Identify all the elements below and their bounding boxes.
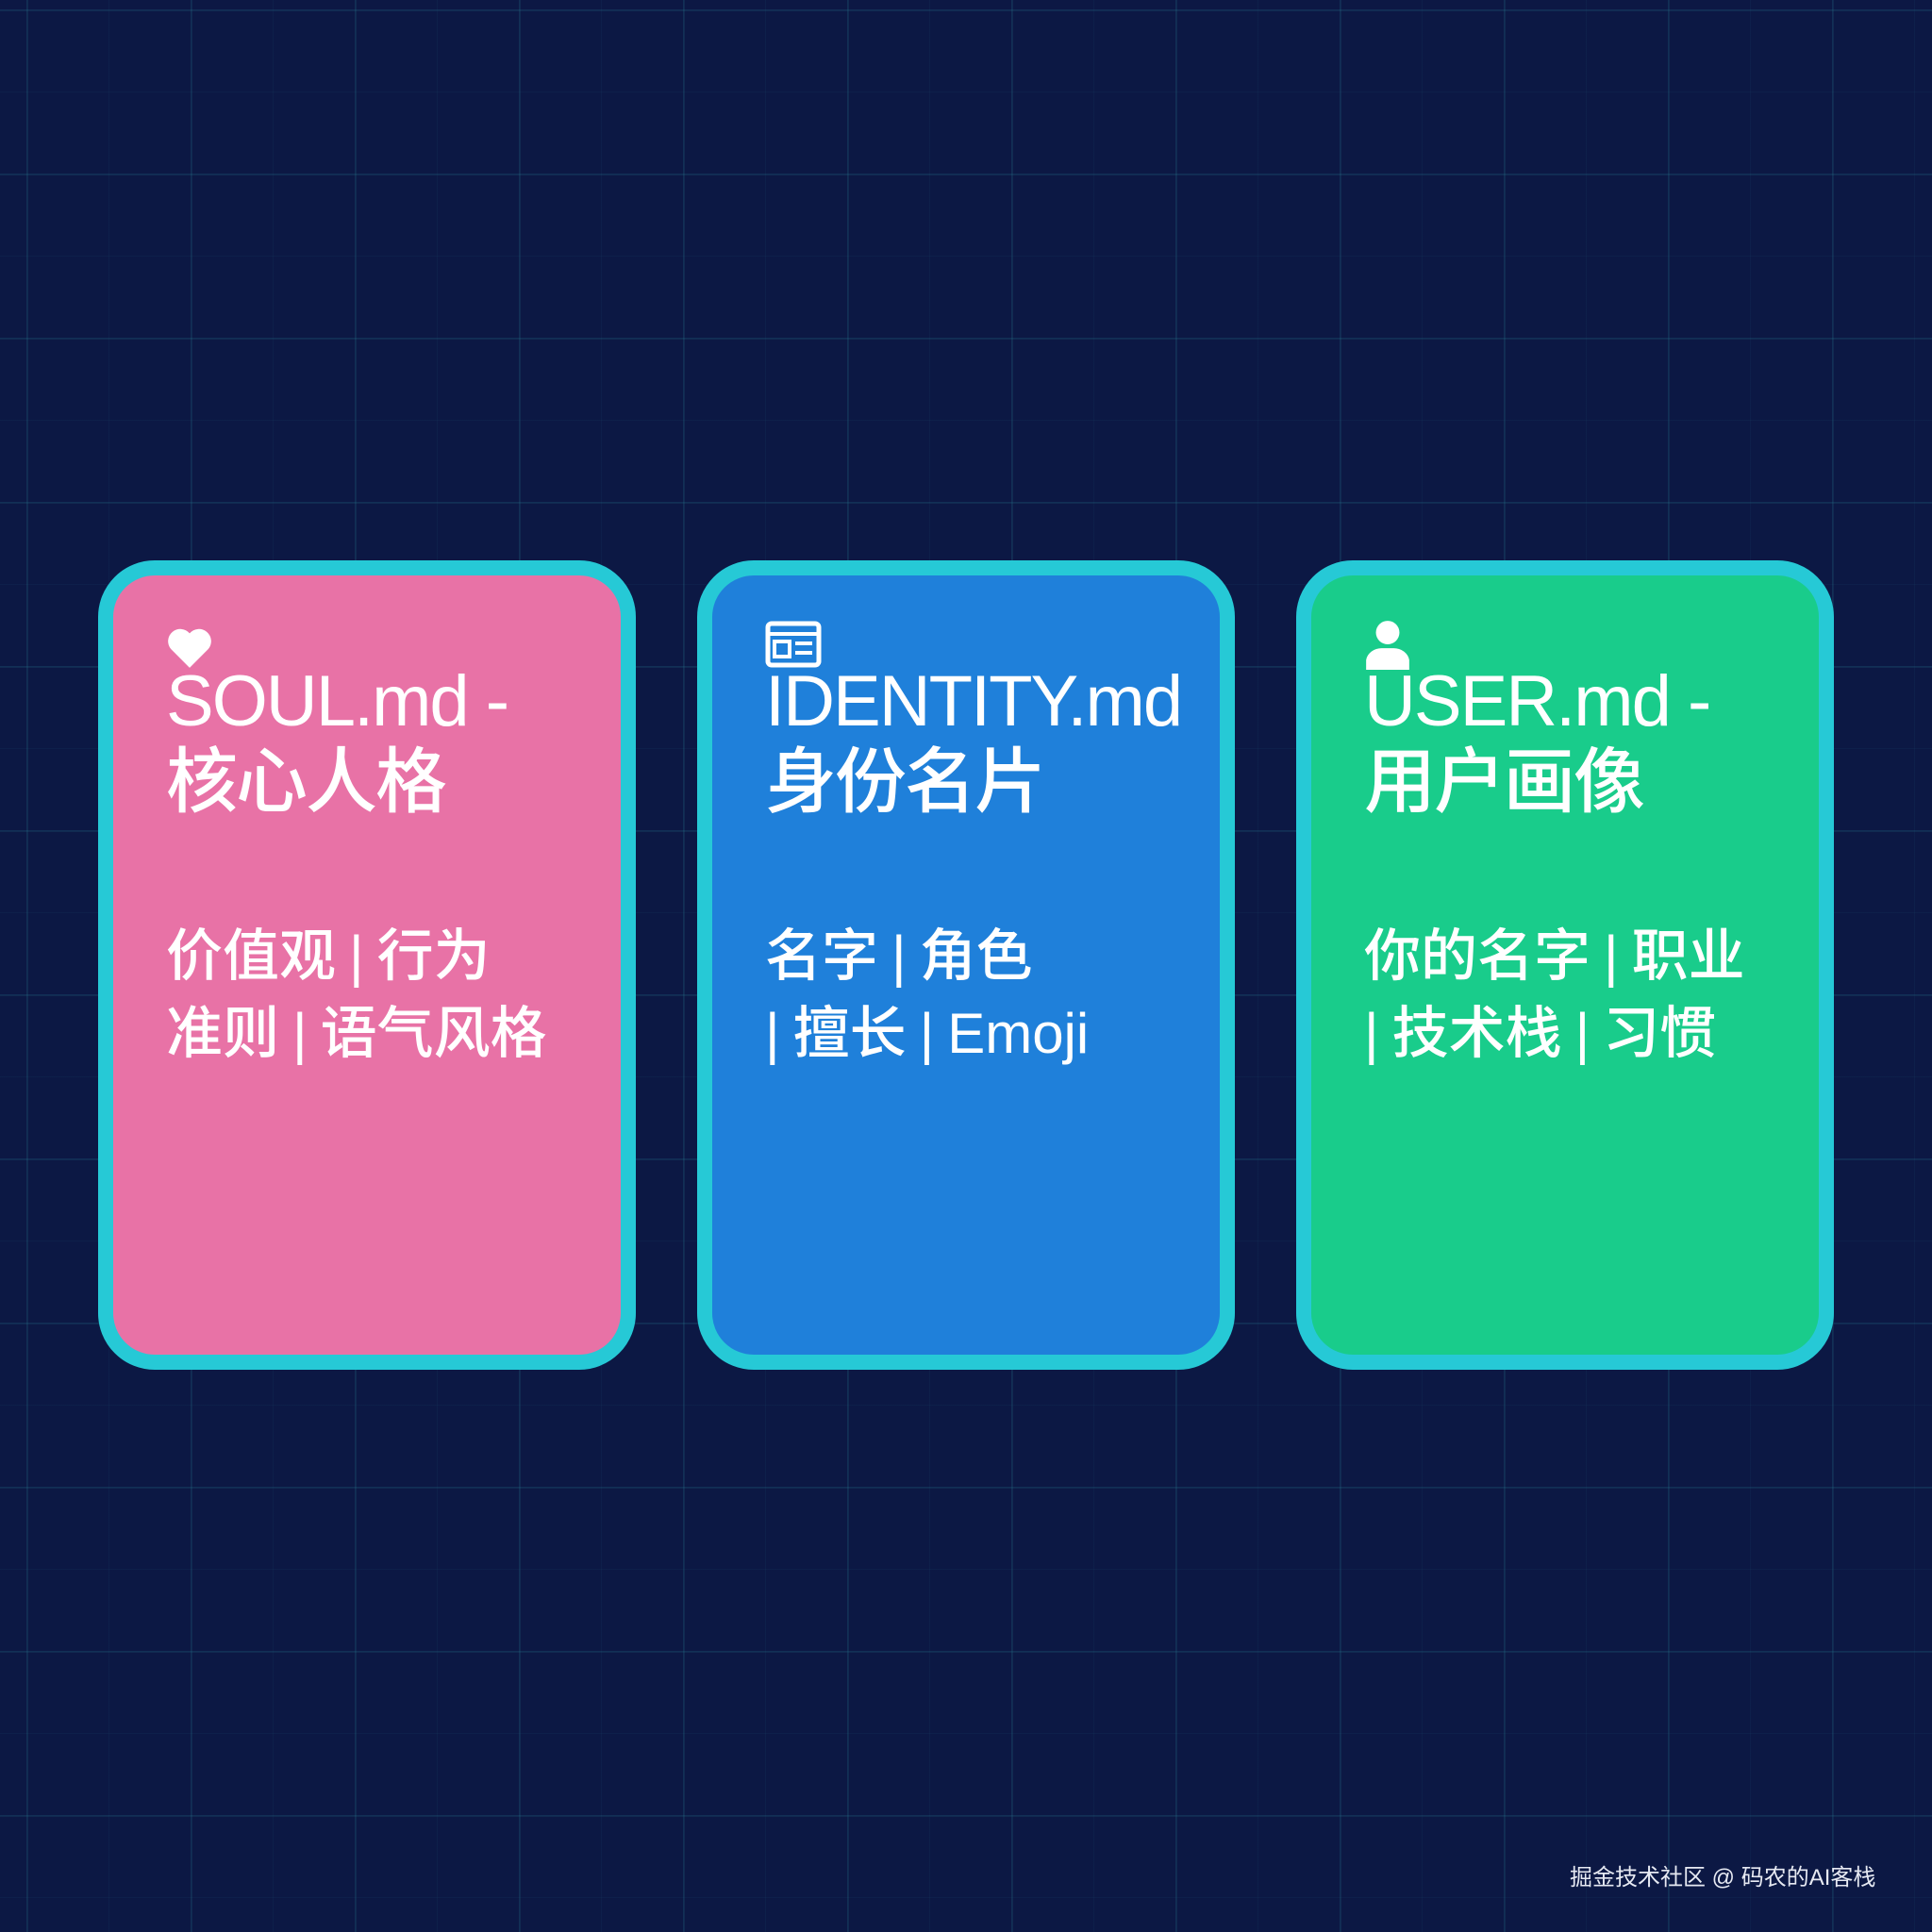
title: SOUL.md: 核心人格 bbox=[166, 742, 445, 823]
text: identity contents: |擅长|Emoji bbox=[765, 1002, 1089, 1065]
icon: user bbox=[1366, 621, 1409, 670]
title: USER.md bbox=[1364, 661, 1709, 823]
title: IDENTITY.md: IDENTITY.md bbox=[765, 661, 1181, 741]
title: USER.md: USER.md - bbox=[1364, 661, 1709, 741]
title: IDENTITY.md: 身份名片 bbox=[765, 742, 1044, 823]
title: USER.md: 用户画像 bbox=[1364, 742, 1643, 823]
text: user contents: |技术栈|习惯 bbox=[1364, 1002, 1716, 1065]
text: user contents: 你的名字|职业 bbox=[1364, 924, 1745, 988]
icon: heart bbox=[168, 628, 211, 668]
watermark: 掘金技术社区 @ 码农的AI客栈 bbox=[1570, 1865, 1875, 1890]
icon: id card bbox=[766, 621, 821, 668]
text: soul contents: 价值观|行为 bbox=[166, 924, 491, 988]
title: IDENTITY.md bbox=[765, 661, 1181, 823]
title: SOUL.md bbox=[166, 661, 508, 823]
text: soul contents bbox=[166, 924, 547, 1065]
text: identity contents bbox=[765, 924, 1089, 1065]
text: soul contents: 准则|语气风格 bbox=[166, 1002, 547, 1065]
text: user contents bbox=[1364, 924, 1745, 1065]
title: SOUL.md: SOUL.md - bbox=[166, 661, 508, 741]
card: IDENTITY.md bbox=[697, 560, 1235, 1370]
card: SOUL.md bbox=[98, 560, 636, 1370]
card: USER.md bbox=[1296, 560, 1834, 1370]
text: identity contents: 名字|角色 bbox=[765, 924, 1033, 988]
